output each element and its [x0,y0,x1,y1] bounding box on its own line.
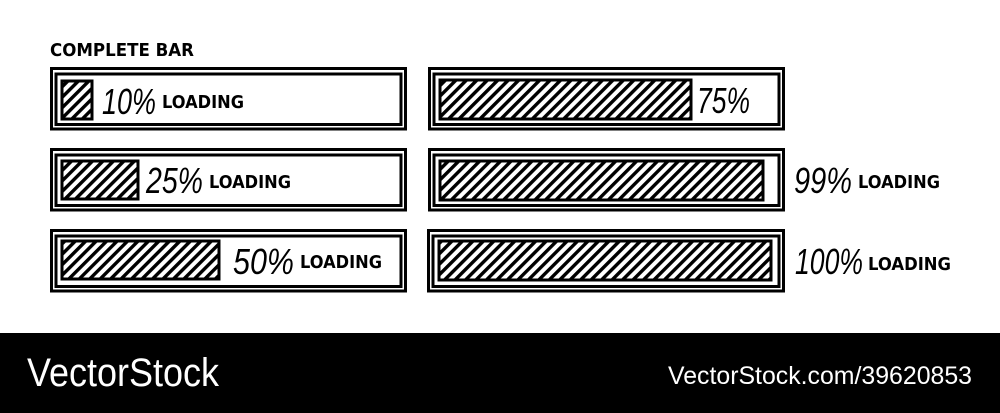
panel: 25% loading bar: LOADING [209,172,291,193]
title: COMPLETE BAR [50,40,194,61]
panel: 10% loading bar: LOADING [162,92,244,113]
brand logo text: VectorStock [27,351,220,395]
panel: 100% loading bar [428,230,951,291]
panel: 75% bar: 75% [697,80,750,121]
panel: 25% loading bar: 25% [145,160,203,201]
image id text: VectorStock.com/39620853 [668,362,972,390]
panel: 50% loading bar: LOADING [300,252,382,273]
panel: 100% loading bar: 100% [795,241,863,282]
panel: 99% loading bar: LOADING [858,172,940,193]
panel: 75% bar [430,68,784,129]
panel: 99% loading bar [430,150,940,210]
panel: 100% loading bar: LOADING [868,254,951,275]
panel: 99% loading bar: 99% [794,160,852,201]
panel: 50% loading bar: 50% [233,241,294,282]
panel: 50% loading bar [52,230,406,291]
panel: 10% loading bar [52,68,406,129]
footer band [0,333,1000,413]
panel: 25% loading bar [52,150,406,210]
panel: 10% loading bar: 10% [102,81,156,122]
